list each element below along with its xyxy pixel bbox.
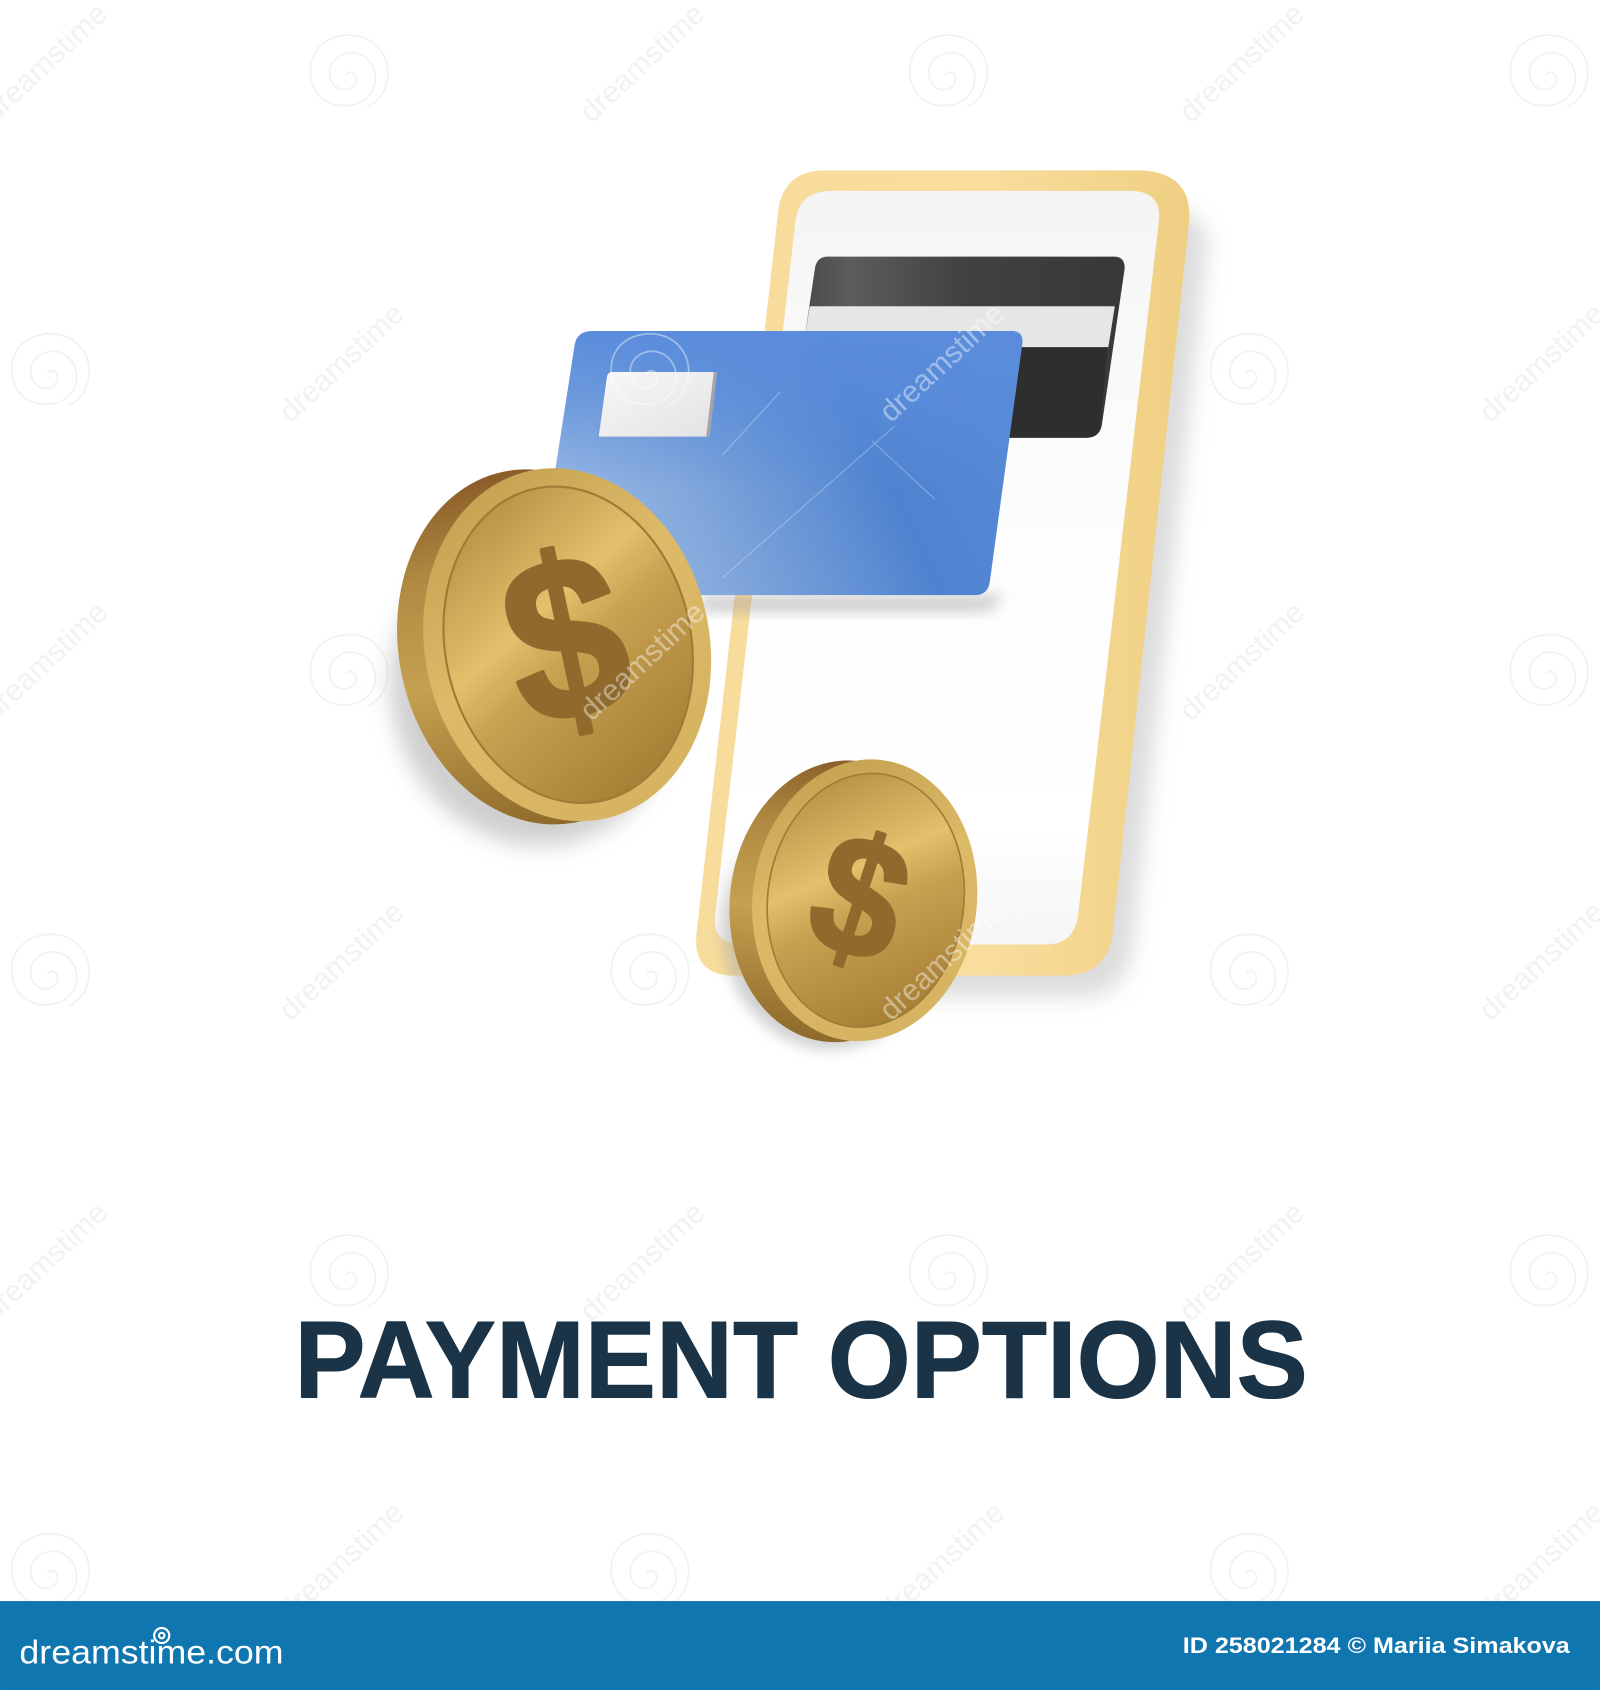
- coin edge: [714, 748, 968, 1055]
- title: PAYMENT OPTIONS: [294, 1298, 1308, 1421]
- watermark pattern: dreamstime: [273, 297, 411, 429]
- coin rim: [736, 746, 993, 1054]
- watermark pattern: dreamstime: [873, 1496, 1011, 1628]
- magnetic stripe: [803, 306, 1115, 347]
- watermark pattern: dreamstime: [1173, 596, 1311, 727]
- footer logo text: dreamstime.com: [19, 1635, 284, 1672]
- watermark over artwork: dreamstime: [873, 895, 1011, 1027]
- blue credit card: [541, 331, 1022, 595]
- phone screen: [715, 191, 1159, 944]
- small gold coin: [714, 746, 993, 1055]
- phone: [696, 170, 1189, 976]
- coin shadow large: [358, 504, 710, 876]
- watermark pattern: dreamstime: [574, 1196, 711, 1328]
- coin face: [753, 762, 979, 1038]
- dollar sign: $: [482, 501, 649, 776]
- card chip: [599, 372, 717, 437]
- coin edge: [365, 442, 716, 851]
- watermark pattern: dreamstime: [574, 0, 711, 129]
- footer bar: [0, 1601, 1600, 1690]
- footer logo spiral mark: [154, 1628, 169, 1643]
- phone shadow: [755, 216, 1206, 997]
- watermark over artwork: dreamstime: [873, 297, 1011, 429]
- dollar sign: $: [789, 793, 931, 1001]
- black card behind: [803, 257, 1125, 438]
- blue card shadow: [701, 588, 1001, 612]
- faint watermark lines on card: [722, 391, 935, 578]
- watermark pattern: dreamstime: [273, 1496, 411, 1628]
- watermark over artwork: [574, 297, 1011, 1027]
- watermark pattern: dreamstime: [273, 895, 411, 1027]
- watermark pattern: dreamstime: [1173, 1196, 1311, 1328]
- coin rim: [391, 441, 743, 848]
- image credit: ID 258021284 © Mariia Simakova: [1183, 1633, 1570, 1658]
- watermark pattern: dreamstime: [1173, 0, 1311, 129]
- watermark over artwork: dreamstime: [574, 596, 711, 727]
- coin face: [415, 463, 722, 826]
- coin shadow small: [722, 809, 938, 1050]
- phone frame: [696, 170, 1189, 976]
- large gold coin: [365, 441, 743, 851]
